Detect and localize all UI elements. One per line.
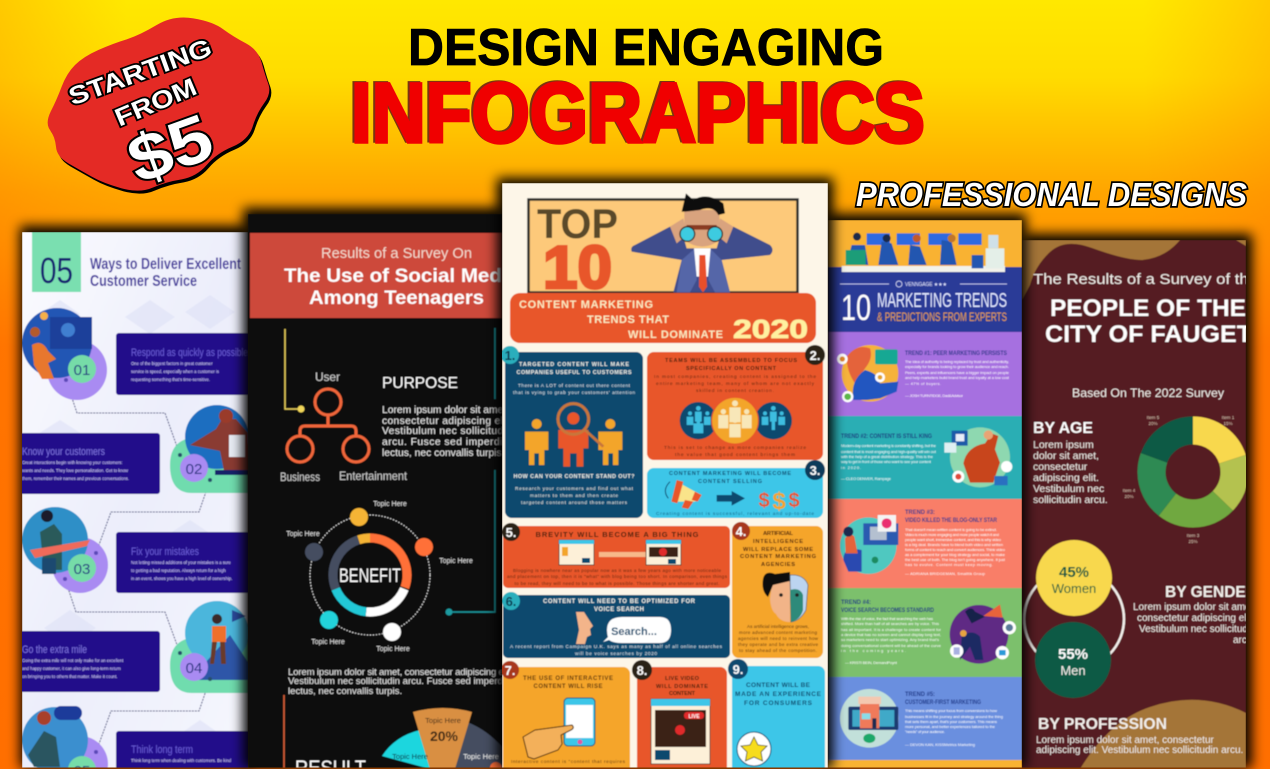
survey header — [250, 233, 519, 318]
lorem paragraph: Vestibulum nec sollicitudin arcu. Fusce sed imperdiet — [288, 676, 513, 687]
by gender text: Vestibulum nec sollicitudin — [1139, 624, 1256, 635]
card 3: $ — [758, 490, 770, 512]
benefit cycle diagram — [286, 501, 473, 653]
org chart icon: Business — [280, 470, 320, 484]
trend 4: in the coming years. — [841, 648, 906, 653]
card 5: to be read, they will need to be to what is possible. Those things are shorter and great. — [514, 581, 720, 586]
card 2: the value that good content brings them — [675, 452, 795, 458]
survey title: Based On The 2022 Survey — [1072, 386, 1224, 400]
top brown blob — [1022, 240, 1246, 300]
card 3: $ — [772, 488, 786, 515]
heading: Customer Service — [90, 273, 197, 290]
card 9: CONTENT WILL BE — [746, 682, 811, 689]
card 8: LIVE VIDEO — [665, 676, 700, 682]
card 2: TEAMS WILL BE ASSEMBLED TO FOCUS — [665, 358, 797, 364]
survey title — [1033, 271, 1258, 400]
by age text: consectetur — [1033, 461, 1088, 473]
card 9 — [728, 659, 825, 769]
step 1 box — [116, 333, 266, 395]
heading: Ways to Deliver Excellent — [90, 256, 242, 273]
card 7 — [501, 661, 630, 769]
banner — [510, 293, 816, 344]
card 1: targeted content around those matters — [521, 500, 628, 506]
card 4: CONTENT MARKETING — [740, 554, 817, 560]
trend 4: shifted. More than half of all searches are by voice. This — [841, 621, 939, 626]
org chart icon: Entertainment — [339, 469, 408, 483]
trend 5 — [840, 689, 1003, 748]
card 5: BREVITY WILL BECOME A BIG THING — [536, 530, 699, 539]
card 1: that is vying to grab your customers' attention — [513, 390, 635, 396]
card 1: TARGETED CONTENT WILL MAKE — [519, 362, 629, 368]
trend 1 — [837, 345, 1010, 402]
survey header: The Use of Social Media — [284, 266, 519, 287]
trend 3: — ADRIANA BRIDGEMAN, Smalltik Group — [905, 571, 986, 576]
by gender text: Lorem ipsum dolor sit amet, — [1133, 602, 1256, 613]
step 3 box — [116, 532, 266, 593]
trend 3: Video is much more engaging and more people watch it and — [905, 532, 999, 537]
trend 3: is a big deal. Brands have to blend both video and written — [905, 542, 1003, 547]
card 1: Research your customers and find out what — [515, 486, 634, 492]
donut chart — [1123, 415, 1235, 544]
trend 2: TREND #2: CONTENT IS STILL KING — [841, 434, 932, 440]
purpose text: lectus, nec convallis turpis. — [382, 448, 504, 459]
card 4: more advanced content marketing — [739, 630, 817, 635]
step 1 box: requesting something that's time-sensitive. — [131, 377, 210, 382]
trend 5: more personal, and better experiences tailored to the — [905, 724, 996, 729]
trend 4 — [841, 600, 1016, 665]
result pie chart: 20% — [430, 728, 459, 744]
card 5: and placement on top, then it is "what" with blog being too short. In comparison, even things — [507, 574, 728, 579]
hero: top 10 with binocular man — [528, 193, 798, 301]
step 1 box: Respond as quickly as possible — [131, 347, 248, 359]
by age text: dolor sit amet, — [1033, 450, 1099, 462]
survey header: Among Teenagers — [309, 288, 484, 309]
card 3: CONTENT MARKETING WILL BECOME — [669, 471, 791, 477]
card 4: they operate and be extra creative — [738, 642, 818, 647]
shadow for panel 3 — [497, 178, 833, 768]
step 4 box — [10, 631, 160, 692]
trend 5: that sets them apart, that's your customers. This means — [905, 719, 997, 724]
step 4 illustration — [170, 600, 248, 694]
benefit cycle diagram: Topic Here — [286, 531, 320, 538]
donut chart: Item 5 — [1147, 415, 1160, 420]
by age text: BY AGE — [1033, 420, 1093, 437]
survey header: Results of a Survey On — [321, 246, 472, 262]
trend 1: — JOSH TURNTIDGE, Dad&Advisor — [905, 393, 964, 398]
trend 4: With the rise of voice, the fact that searching the web has — [841, 616, 933, 621]
purpose text: PURPOSE — [382, 375, 458, 392]
step 1 box: service is speed, especially when a customer is — [131, 369, 219, 374]
card 7: 7. — [505, 663, 515, 678]
hero: top 10 with binocular man: TOP — [537, 200, 618, 247]
card 2: skilled in content creation. — [696, 388, 774, 394]
card 7: Interactive content is "content that requires — [511, 759, 626, 765]
price badge: $5 — [118, 99, 222, 198]
trend 4: a device that has no screen and cannot display long text, — [841, 632, 941, 637]
price badge — [48, 17, 271, 198]
trend 5: businesses fit in the journey and strategy around the thing — [905, 714, 1003, 719]
result pie chart: Topic Here — [392, 752, 428, 761]
card 5: Blogging is nowhere near as popular now as it was a few years ago with more noticeable — [513, 568, 721, 573]
step 4 illustration: 04 — [186, 660, 202, 677]
by age text: Lorem ipsum — [1033, 439, 1094, 451]
by age text — [1033, 420, 1108, 506]
by gender text: arcu. — [1233, 635, 1255, 646]
org chart icon: User — [315, 370, 340, 384]
title: design engaging: DESIGN ENGAGING — [408, 19, 884, 77]
step 4 box: on bringing you to others that matter. Make it count. — [22, 674, 117, 679]
card 7: THE USE OF INTERACTIVE — [523, 676, 613, 682]
result pie chart — [382, 708, 505, 769]
trend 3: the best use of both. The blog isn't going anywhere. It just — [905, 557, 1006, 562]
card 8: 8. — [637, 663, 647, 678]
step 3 box: to getting a bad reputation. Always return for a high — [131, 568, 226, 573]
card 1: HOW CAN YOUR CONTENT STAND OUT? — [514, 474, 635, 480]
shadows for panels 2 and 4 — [243, 208, 1026, 768]
card 4 — [732, 522, 823, 658]
purpose text: consectetur adipiscing elit. — [382, 416, 512, 427]
card 4: ARTIFICIAL — [763, 531, 794, 537]
card 6: will be voice searches by 2020 — [575, 651, 657, 657]
card 3: 3. — [810, 463, 820, 478]
trend 4: TREND #4: — [841, 600, 871, 606]
step 4 box: and happy customer, it can also give long-term return — [22, 666, 121, 671]
trend 3: TREND #3: — [905, 510, 935, 516]
gender circles: Men — [1060, 663, 1086, 678]
step 3 box: in an event, shows you have a high level of ownership. — [131, 576, 232, 581]
card 1 — [501, 346, 643, 518]
trend 3: VIDEO KILLED THE BLOG-ONLY STAR — [905, 518, 998, 524]
card 6: CONTENT WILL NEED TO BE OPTIMIZED FOR — [543, 599, 696, 605]
donut chart: 20% — [1124, 494, 1134, 499]
subtitle: professional designs: PROFESSIONAL DESIGNS — [856, 176, 1247, 213]
trend 2: way to get in front of those who want to see your content — [841, 459, 932, 464]
by gender text — [1132, 585, 1246, 644]
trend 4: — KRISTI BEIN, DemandPoynt — [845, 660, 898, 665]
bottom brown blob — [1080, 700, 1246, 769]
trend 1: and help marketers build brand trust and loyalty at a low cost — [905, 375, 1010, 380]
by gender text: consectetur adipiscing elit. — [1137, 613, 1254, 624]
card 5 — [502, 523, 730, 588]
step 5 illustration — [22, 706, 108, 769]
step 1 illustration: 01 — [74, 362, 90, 379]
step 2 box: wants and needs. They love personalization. Get to know — [22, 468, 129, 473]
hero: top 10 with binocular man: 10 — [543, 234, 612, 301]
trend 3: people want short, immersive content, and this is why video — [905, 537, 1002, 542]
card 8 — [632, 660, 727, 769]
trend 1: especially for brands looking to grow their audience and reach. — [905, 364, 1009, 369]
step 2 box: them, remember their names and previous conversations. — [22, 476, 129, 481]
org chart icon — [280, 370, 408, 484]
title: infographics: INFOGRAPHICS — [351, 66, 925, 160]
purpose text: arcu. Fusce sed imperdiet — [382, 437, 512, 448]
panel shadows 1 and 5 — [20, 226, 1252, 768]
title: infographics: INFOGRAPHICS — [349, 65, 923, 159]
connector lines — [284, 328, 495, 769]
benefit cycle diagram: Topic Here — [373, 501, 407, 508]
office illustration — [842, 233, 1005, 272]
step 5 box — [115, 730, 248, 768]
card 2: In most companies, creating content is assigned to the — [654, 374, 816, 380]
step 4 box: Go the extra mile — [22, 644, 87, 656]
card 4: to stay ahead of the competition. — [739, 648, 817, 653]
donut chart: Item 1 — [1222, 415, 1235, 420]
step 1 box: One of the biggest factors in great customer — [131, 361, 213, 366]
donut chart: 15% — [1223, 421, 1233, 426]
card 4: INTELLIGENCE — [753, 539, 803, 545]
step 2 box: Know your customers — [22, 446, 105, 458]
card 6: Search... — [611, 626, 657, 638]
by profession text: adipiscing elit. Vestibulum nec sollicitudin arcu. — [1036, 745, 1243, 756]
card 8: CONTENT — [669, 691, 696, 697]
by age text: sollicitudin arcu. — [1033, 494, 1108, 506]
card 9: 9. — [733, 662, 743, 677]
trend 2: with the help of a great distribution strategy. This is the — [841, 454, 934, 459]
lorem paragraph: Lorem ipsum dolor sit amet, consectetur adipiscing elit. — [288, 667, 513, 678]
trend 3: as a complement for your blog strategy and social, to make — [905, 552, 1006, 557]
panel: social media survey — [248, 214, 519, 769]
step 3 box: Fix your mistakes — [131, 546, 199, 558]
card 7: CONTENT WILL RISE — [534, 684, 602, 690]
panel: customer service infographic — [22, 232, 248, 768]
card 6: 6. — [506, 594, 516, 609]
trend 1: The idea of authority is being replaced by trust and authenticity, — [905, 359, 1009, 364]
card 3 — [647, 460, 825, 518]
card 3: $ — [788, 490, 800, 512]
card 4: 4. — [736, 524, 746, 539]
trend 2: content that is most engaging and high-quality will win out — [841, 449, 937, 454]
step 5 box: Think long term when dealing with customers. Be kind — [131, 758, 232, 763]
trend 3: has to evolve. Content must keep moving. — [905, 562, 993, 567]
by profession text: BY PROFESSION — [1038, 716, 1167, 733]
card 2: entire marketing team, many of whom are not exactly — [656, 381, 815, 387]
card 6 — [502, 592, 730, 658]
benefit cycle diagram: Topic Here — [439, 558, 473, 565]
step 3 box: Not letting missed additions of your mistakes is a sure — [131, 560, 232, 565]
card 1: COMPANIES USEFUL TO CUSTOMERS — [516, 370, 632, 376]
purpose text — [382, 375, 512, 459]
card 1: There is A LOT of content out there content — [518, 383, 631, 389]
step 3 illustration: 03 — [74, 561, 90, 578]
lorem paragraph: lectus, nec convallis turpis. — [288, 686, 402, 697]
marketing trends title: & PREDICTIONS FROM EXPERTS — [877, 312, 1007, 324]
trend 5: This means shifting your focus from conversions to how — [905, 708, 997, 713]
result pie chart: Topic Here — [425, 716, 461, 725]
card 2: SPECIFICALLY ON CONTENT — [686, 366, 777, 372]
trend 4: doing conversational content will be ahead of the curve — [841, 643, 942, 648]
trend 2: in 2020. — [841, 465, 861, 470]
step 2 box — [10, 433, 160, 494]
step 2 illustration: 02 — [186, 461, 202, 478]
purpose text: Lorem ipsum dolor sit amet, — [382, 405, 509, 416]
trend 5: TREND #5: — [905, 692, 935, 698]
card 8: WILL DOMINATE — [656, 684, 708, 690]
card 6: A recent report from Campaign U.K. says as many as half of all online searches — [510, 644, 723, 650]
banner: 2020 — [733, 314, 808, 344]
survey title: PEOPLE OF THE — [1050, 295, 1246, 322]
trend 5: CUSTOMER-FIRST MARKETING — [905, 700, 981, 706]
step 4 box: Going the extra mile will not only make for an excellent — [22, 658, 124, 663]
trend 3: forms of content to reach and convert audiences. Think video — [905, 547, 1006, 552]
panel: top 10 content marketing trends — [501, 183, 828, 769]
card 3: Creating content is successful, relevant and up-to-date — [656, 511, 814, 517]
trend 2: Modern-day content marketing is constantly shifting, but the — [841, 443, 937, 448]
marketing trends title — [840, 281, 1007, 328]
card 1: 1. — [505, 348, 515, 363]
banner: TRENDS THAT — [587, 314, 669, 326]
gender circles — [1024, 540, 1124, 698]
card 3: CONTENT SELLING — [698, 479, 762, 485]
card 4: WILL REPLACE SOME — [743, 547, 813, 553]
card 5: 5. — [506, 525, 516, 540]
step 2 illustration — [170, 405, 249, 493]
step 5 box: Think long term — [131, 744, 193, 756]
trend 2: — CLEO DENVER, Rampage — [841, 476, 892, 481]
card 4: agencies will need to reinvent how — [738, 636, 819, 641]
card 4: As artificial intelligence grows, — [747, 624, 809, 629]
card 1: matters to them and then create — [530, 493, 618, 499]
marketing trends title: MARKETING TRENDS — [877, 290, 1007, 312]
gender circles: Women — [1052, 581, 1096, 596]
benefit cycle diagram: Topic Here — [376, 646, 410, 653]
by profession text: Lorem ipsum dolor sit amet, consectetur — [1036, 735, 1215, 746]
donut chart: 20% — [1148, 421, 1158, 426]
donut chart: Item 4 — [1123, 488, 1136, 493]
trend 5: "needs" of your audience. — [905, 729, 945, 734]
card 6: VOICE SEARCH — [594, 607, 644, 613]
marketing trends title: VENNGAGE ★★★ — [905, 282, 948, 288]
donut chart: 25% — [1188, 539, 1198, 544]
step 3 illustration — [22, 507, 108, 593]
step 1 illustration — [22, 308, 107, 400]
trend 4: so marketers need to start optimizing. Any brand that's — [841, 637, 939, 642]
trend 1: — 47% of buyers. — [905, 381, 941, 386]
connector dotted lines — [68, 399, 206, 744]
card 2: This is set to change as more companies realize — [664, 445, 806, 451]
benefit cycle diagram: Topic Here — [311, 639, 345, 646]
trend 3 — [840, 510, 1006, 576]
survey title: CITY OF FAUGET — [1045, 321, 1252, 348]
by age text: adipiscing elit. — [1033, 472, 1099, 484]
trend 1: TREND #1: PEER MARKETING PERSISTS — [905, 351, 1007, 357]
trend 2 — [841, 427, 1012, 487]
card 8: LIVE — [688, 714, 700, 720]
panel: survey results 2 — [1022, 240, 1258, 769]
by profession text — [1036, 716, 1243, 756]
by gender text: BY GENDER — [1165, 584, 1257, 601]
card 2: 2. — [810, 348, 820, 363]
survey title: The Results of a Survey of the — [1033, 271, 1258, 288]
heading — [32, 232, 242, 292]
price badge: STARTING — [65, 34, 216, 111]
trend 1: Peers, experts and influencers have a bigger impact on people — [905, 370, 1010, 375]
result pie chart: Topic Here — [463, 752, 499, 761]
trend 3: That doesn't mean written content is going to be extinct. — [905, 527, 997, 532]
banner: CONTENT MARKETING — [519, 299, 653, 311]
trend 4: has all important. It is a challenge to create content for — [841, 627, 942, 632]
lorem paragraph — [288, 667, 513, 697]
marketing trends title: 10 — [841, 287, 871, 328]
donut chart: Item 3 — [1187, 533, 1200, 538]
trend 4: VOICE SEARCH BECOMES STANDARD — [841, 608, 935, 614]
card 4: AGENCIES — [761, 562, 795, 568]
panel: marketing trends — [828, 220, 1022, 769]
heading: 05 — [40, 250, 73, 291]
by age text: Vestibulum nec — [1033, 483, 1104, 495]
trend 5: — DEVON KAN, KISSMetrics Marketing — [905, 742, 975, 747]
banner: WILL DOMINATE — [628, 329, 723, 341]
gender circles: 55% — [1058, 646, 1088, 663]
benefit cycle diagram: BENEFIT — [339, 566, 401, 587]
card 9: MADE AN EXPERIENCE — [735, 691, 822, 698]
card 9: FOR CONSUMERS — [744, 700, 813, 707]
purpose text: Vestibulum nec sollicitudin — [382, 426, 512, 437]
price badge: FROM — [111, 73, 201, 132]
gender circles: 45% — [1059, 564, 1089, 581]
step 2 box: Great interactions begin with knowing your customers: — [22, 460, 123, 465]
card 2 — [647, 345, 825, 460]
